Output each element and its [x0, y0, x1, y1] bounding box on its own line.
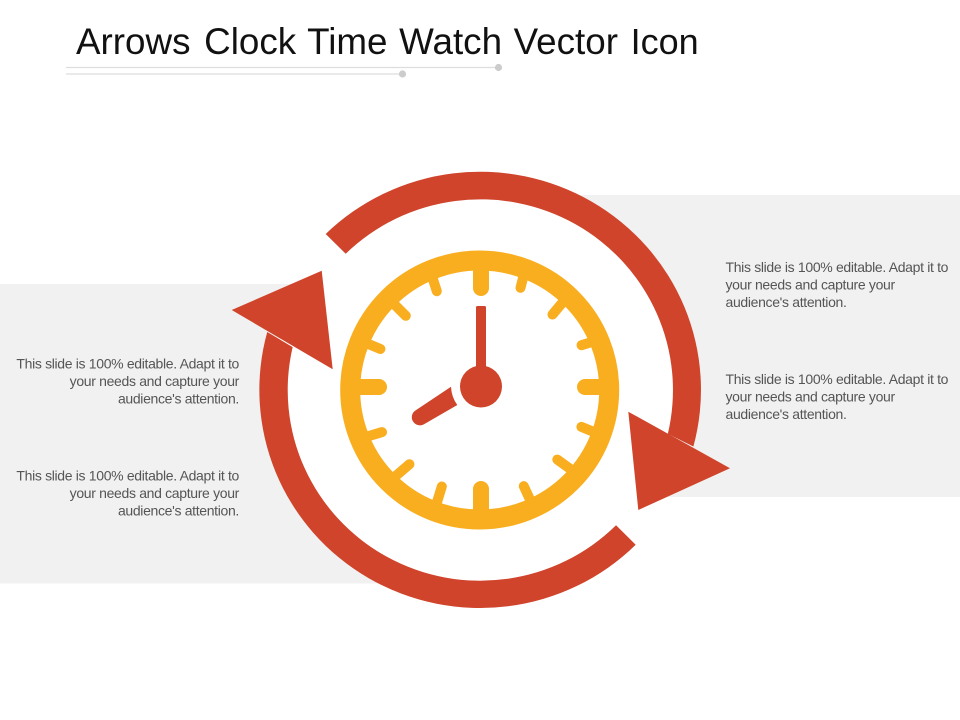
- text block: right top: your needs and capture your: [726, 276, 895, 292]
- text block: right bottom: your needs and capture your: [726, 388, 895, 404]
- text block: right bottom: audience's attention.: [726, 406, 847, 422]
- inner white disc: [274, 186, 686, 594]
- text block: right top: audience's attention.: [726, 294, 847, 310]
- clock ring: [350, 260, 609, 520]
- text block: left bottom: your needs and capture your: [70, 485, 240, 501]
- clock hour ticks: [358, 268, 603, 512]
- panel: right background: [500, 195, 960, 497]
- text block: right top: This slide is 100% editable. Adapt it to: [726, 259, 949, 275]
- text block: left top: your needs and capture your: [70, 373, 240, 389]
- text block: left top: [16, 356, 240, 406]
- text block: right bottom: This slide is 100% editable. Adapt it to: [726, 371, 949, 387]
- text block: left bottom: audience's attention.: [118, 502, 239, 518]
- arrow: top right circular arrow: [326, 172, 730, 510]
- title underline with dots: [66, 64, 502, 78]
- text block: left bottom: This slide is 100% editable. Adapt it to: [16, 468, 240, 484]
- icon: clock: [350, 260, 609, 520]
- panel: left background: [0, 284, 460, 584]
- text block: left top: This slide is 100% editable. Adapt it to: [16, 356, 240, 372]
- clock minute hand: [476, 306, 486, 371]
- text block: left bottom: [16, 468, 240, 518]
- text block: right top: [726, 259, 949, 310]
- clock hour hand: [412, 387, 457, 425]
- clock hub: [460, 366, 502, 408]
- arrow: bottom left circular arrow: [232, 271, 636, 608]
- text block: right bottom: [726, 371, 949, 422]
- text block: left top: audience's attention.: [118, 390, 239, 406]
- title: Arrows Clock Time Watch Vector Icon: [76, 21, 699, 62]
